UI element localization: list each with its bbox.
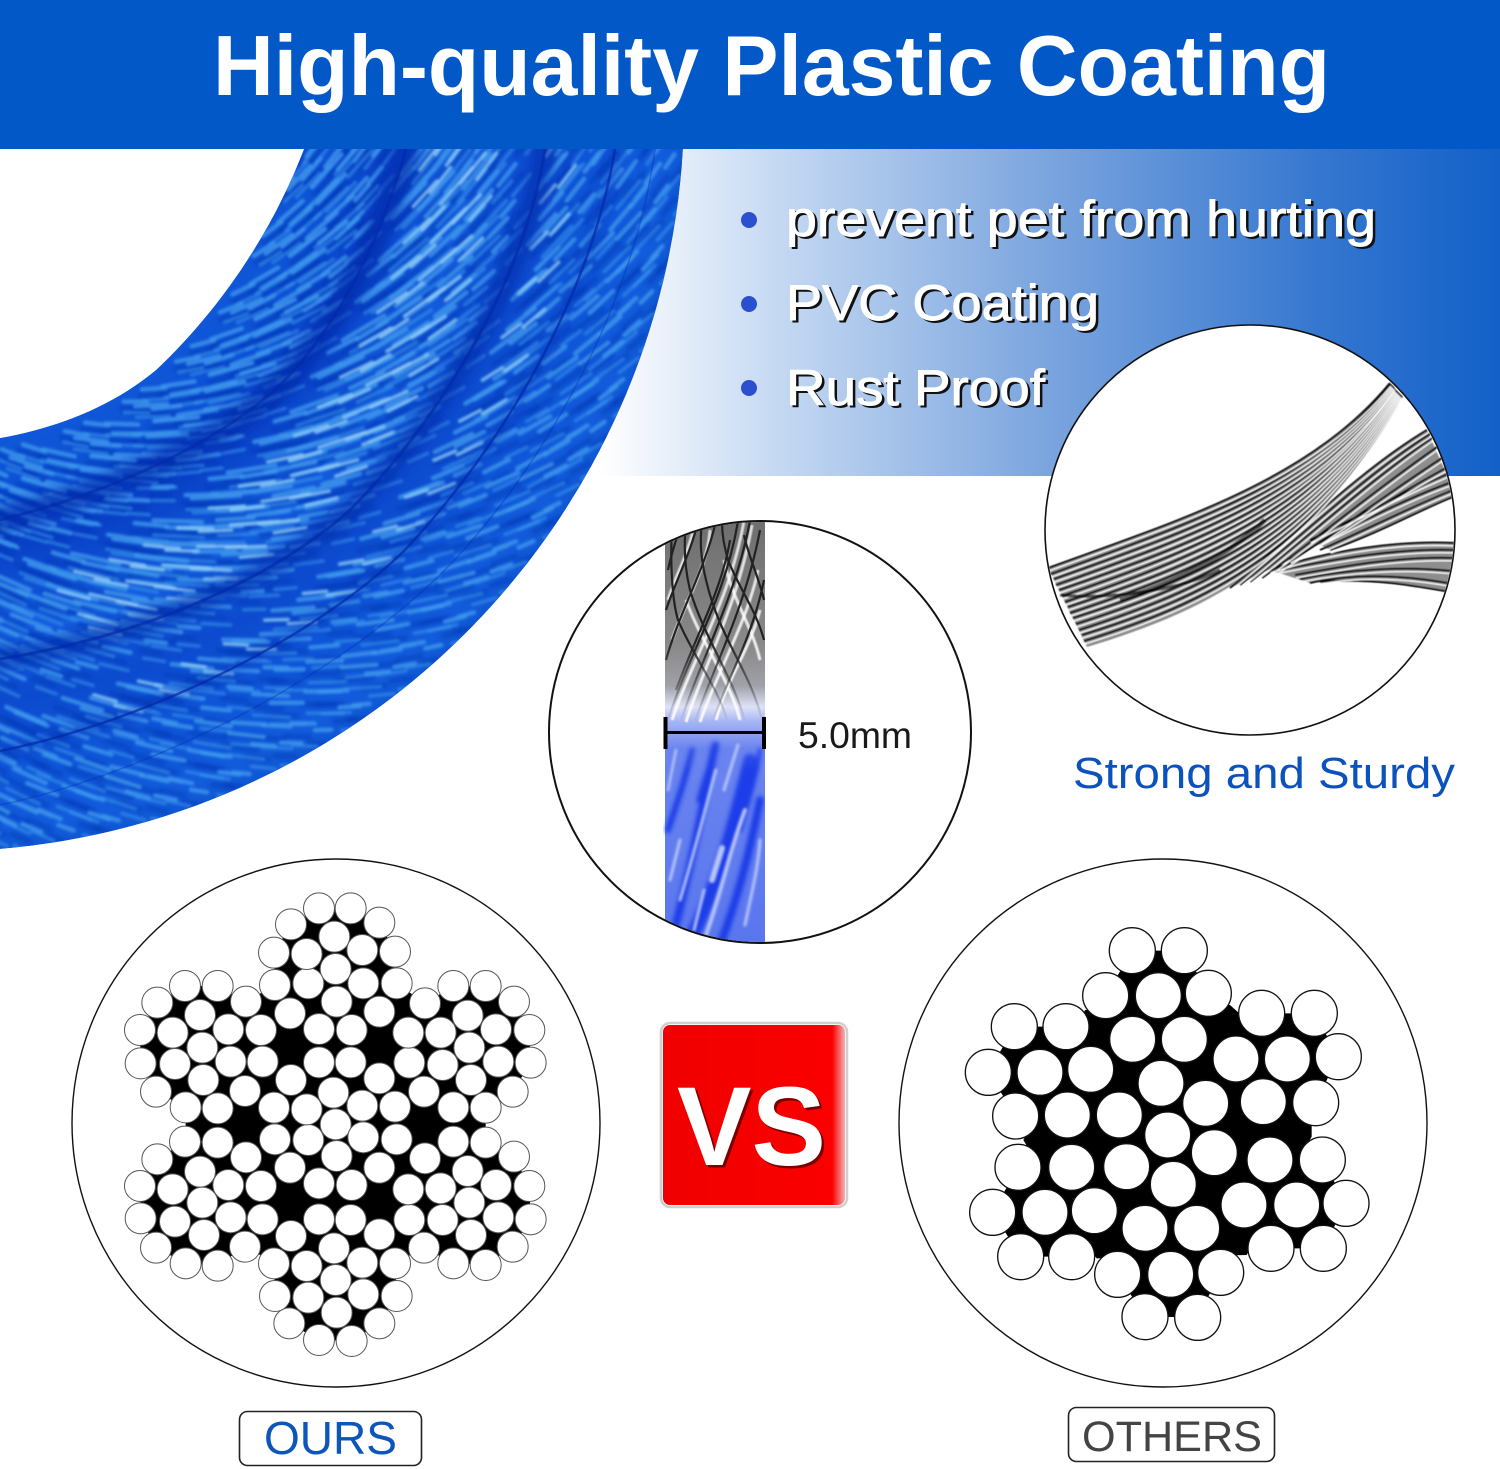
dimension marker bbox=[664, 717, 766, 749]
caption: Strong and Sturdy: Strong and Sturdy bbox=[1073, 749, 1455, 798]
VS badge bbox=[661, 1023, 847, 1207]
panel: ours cross-section bbox=[72, 859, 600, 1387]
bullet: prevent pet from hurting: prevent pet from hurting bbox=[788, 193, 1378, 249]
diagram: 7x19 rope section bbox=[124, 893, 546, 1356]
photo: coiled blue coated wire rope bbox=[0, 149, 683, 849]
panel: others cross-section bbox=[899, 859, 1427, 1387]
feature list bbox=[741, 191, 1378, 418]
label: OTHERS: OTHERS bbox=[1082, 1413, 1262, 1461]
label: OURS: OURS bbox=[264, 1412, 397, 1464]
bullet: Rust Proof: Rust Proof bbox=[786, 360, 1045, 416]
bullet: prevent pet from hurting: prevent pet from hurting bbox=[786, 191, 1376, 247]
VS badge: VS bbox=[677, 1064, 826, 1189]
gradient panel: features bbox=[600, 149, 1500, 476]
circle: bare steel strands bbox=[1045, 325, 1456, 735]
bullet: PVC Coating: PVC Coating bbox=[786, 275, 1099, 331]
VS badge: VS bbox=[680, 1066, 828, 1192]
cable sample: steel core fading into blue coating bbox=[665, 521, 765, 944]
bullet: Rust Proof: Rust Proof bbox=[788, 362, 1048, 418]
title banner bbox=[0, 0, 1500, 149]
diagram: 7x7 rope section bbox=[965, 928, 1369, 1340]
dimension label: 5.0mm bbox=[798, 715, 912, 756]
circle: cable diameter detail bbox=[549, 521, 971, 944]
title: High-quality Plastic Coating bbox=[213, 19, 1330, 114]
bullet: PVC Coating: PVC Coating bbox=[788, 277, 1102, 333]
